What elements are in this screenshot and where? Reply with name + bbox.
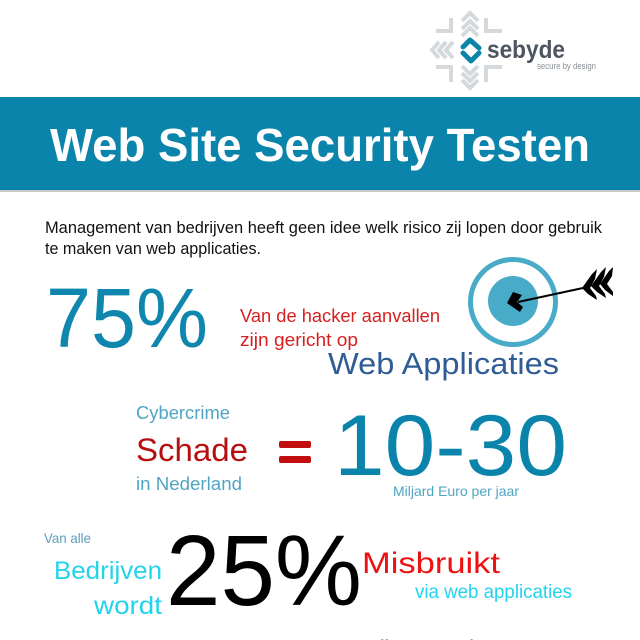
title: Web Site Security Testen	[50, 119, 590, 171]
stat: 25%: 25%	[166, 515, 362, 627]
logo wordmark: sebyde	[487, 36, 565, 64]
label: via web applicaties: via web applicaties	[415, 582, 572, 603]
equals sign	[279, 441, 311, 463]
stat caption: hacker attacks: zijn gericht op	[240, 330, 358, 350]
cybercrime label: Cybercrime	[136, 403, 230, 423]
label: misbruikt: Misbruikt	[362, 547, 501, 580]
stat caption: miljard euro: Miljard Euro per jaar	[393, 483, 519, 499]
icon: snowflake emblem	[432, 13, 502, 88]
stat: 75%: 75%	[46, 271, 208, 365]
intro text	[45, 219, 603, 258]
stat caption: hacker attacks	[240, 306, 440, 350]
label: wordt: wordt	[93, 592, 162, 620]
icon: blue diamond	[463, 40, 479, 61]
logo tagline: secure by design	[537, 61, 596, 71]
intro text: Management van bedrijven heeft geen idee welk risico zij lopen door gebruik	[45, 219, 603, 237]
intro text: te maken van web applicaties.	[45, 240, 261, 258]
label: van alle: Van alle	[44, 530, 91, 546]
stat caption: hacker attacks: Van de hacker aanvallen	[240, 306, 440, 326]
stat: 10-30: 10-30	[334, 398, 567, 494]
heading: web applicaties: Web Applicaties	[328, 346, 559, 381]
in nederland label: in Nederland	[136, 474, 242, 494]
logo: sebyde	[432, 13, 596, 88]
label: bedrijven: Bedrijven	[54, 557, 162, 585]
schade label: Schade	[136, 432, 248, 468]
icon: target with arrow	[470, 260, 613, 344]
title banner	[0, 97, 640, 192]
